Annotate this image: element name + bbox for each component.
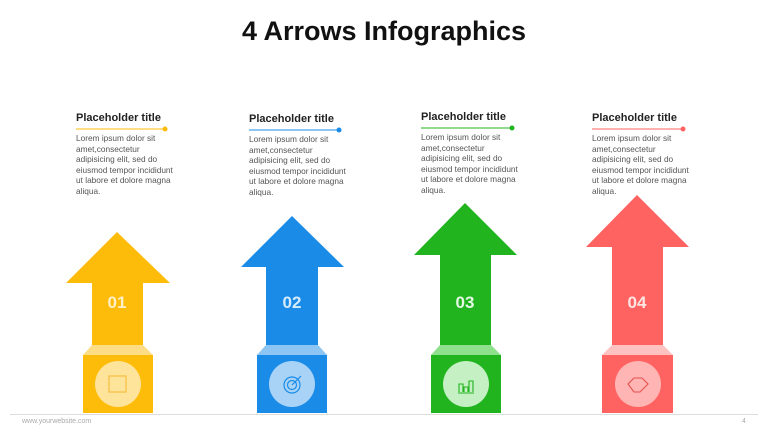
text block 2: amet,consectetur [249, 144, 313, 154]
text block 1: amet,consectetur [76, 144, 140, 154]
text block 2: Placeholder title [249, 113, 334, 125]
text block 2: ut labore et dolore magna [249, 176, 344, 186]
arrow 4 [586, 195, 689, 413]
text block 4: aliqua. [592, 186, 616, 196]
text block 3: adipisicing elit, sed do [421, 153, 502, 163]
text block 4: Placeholder title [592, 112, 677, 124]
arrow 1: 01 [108, 293, 126, 312]
text block 3 [421, 111, 518, 194]
text block 3: aliqua. [421, 184, 445, 194]
text block 1: aliqua. [76, 186, 100, 196]
arrow 3: 03 [456, 293, 474, 312]
arrow 2 [241, 216, 344, 413]
text block 2: eiusmod tempor incididunt [249, 166, 346, 176]
text block 2: adipisicing elit, sed do [249, 155, 330, 165]
text block 1: Lorem ipsum dolor sit [76, 133, 155, 143]
footer [10, 414, 758, 433]
arrow 4: 04 [628, 293, 647, 312]
text block 1: Placeholder title [76, 112, 161, 124]
arrow 2: 02 [283, 293, 301, 312]
footer: www.yourwebsite.com [22, 418, 91, 425]
text block 4: ut labore et dolore magna [592, 175, 687, 185]
text block 1 [76, 112, 173, 196]
text block 1: adipisicing elit, sed do [76, 154, 157, 164]
text block 2: Lorem ipsum dolor sit [249, 134, 328, 144]
text block 1: ut labore et dolore magna [76, 175, 171, 185]
text block 4: adipisicing elit, sed do [592, 154, 673, 164]
text block 1: eiusmod tempor incididunt [76, 164, 173, 174]
title: 4 Arrows Infographics [242, 16, 526, 46]
arrow 3 [414, 203, 517, 413]
text block 4: eiusmod tempor incididunt [592, 164, 689, 174]
text block 3: amet,consectetur [421, 142, 485, 152]
arrow 1 [66, 232, 170, 413]
text block 3: eiusmod tempor incididunt [421, 164, 518, 174]
text block 2 [249, 113, 346, 196]
footer: 4 [742, 418, 746, 425]
text block 2: aliqua. [249, 186, 273, 196]
text block 4: amet,consectetur [592, 144, 656, 154]
text block 4: Lorem ipsum dolor sit [592, 133, 671, 143]
text block 3: ut labore et dolore magna [421, 174, 516, 184]
text block 4 [592, 112, 689, 196]
text block 3: Placeholder title [421, 111, 506, 123]
text block 3: Lorem ipsum dolor sit [421, 132, 500, 142]
